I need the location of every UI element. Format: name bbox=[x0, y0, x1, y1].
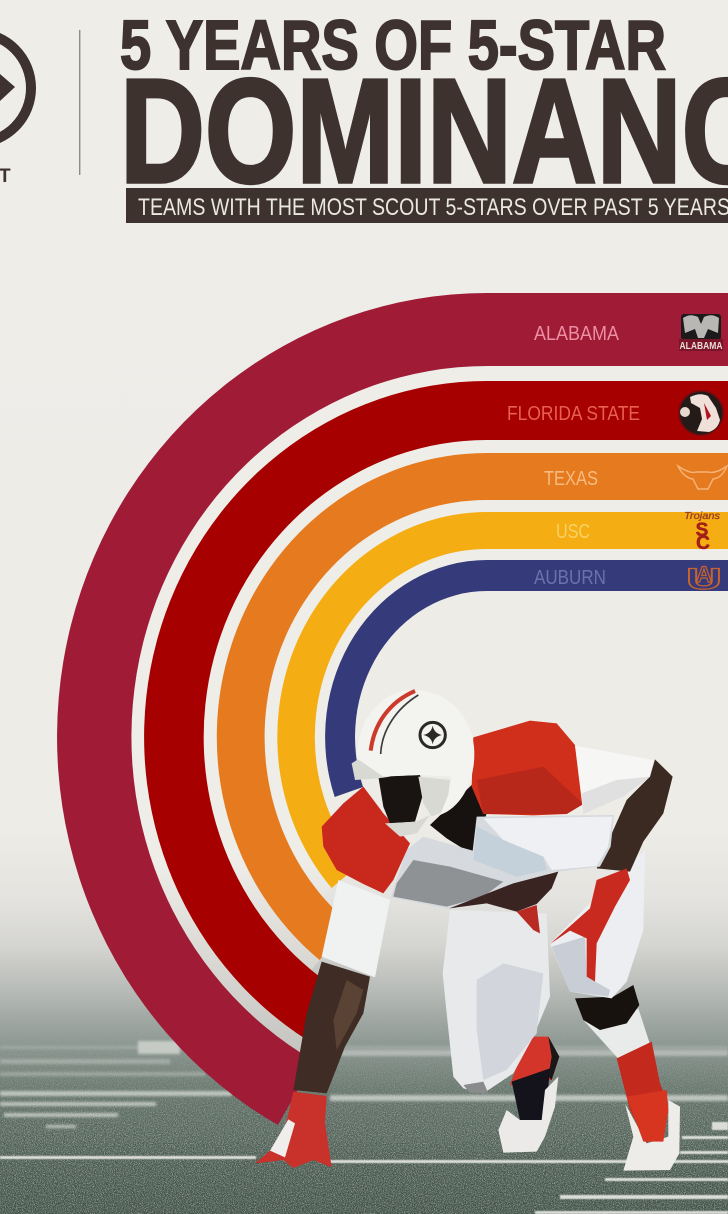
title bbox=[120, 6, 728, 214]
player: rear foot bbox=[498, 1037, 559, 1153]
label: USC: USC bbox=[556, 521, 590, 543]
arc: Texas bbox=[217, 453, 728, 960]
arc: Auburn bbox=[325, 560, 728, 797]
player: jersey shadow bbox=[393, 860, 503, 907]
player: left shoulder pad bbox=[322, 787, 410, 893]
player: right thigh and hip bbox=[550, 850, 645, 998]
icon: USC Trojans logo: C bbox=[696, 533, 710, 554]
icon: Texas longhorn logo bbox=[678, 466, 727, 489]
icon: USC Trojans logo: Trojans bbox=[684, 511, 720, 522]
illustration: football player in three-point stance bbox=[255, 690, 680, 1171]
player: sleeve shading bbox=[582, 777, 650, 814]
player: left sleeve bbox=[322, 880, 390, 977]
icon: Florida State logo bbox=[679, 391, 723, 435]
icon: Auburn AU logo bbox=[686, 562, 722, 596]
label: Auburn: AUBURN bbox=[534, 567, 606, 589]
player: back panel bbox=[472, 721, 583, 815]
player: right upper sleeve bbox=[575, 746, 653, 814]
player: jersey highlight bbox=[483, 817, 613, 870]
yard lines on field bbox=[0, 1041, 728, 1214]
label: Florida State: FLORIDA STATE bbox=[507, 403, 640, 425]
arc: USC bbox=[277, 512, 728, 888]
player: hip red bbox=[517, 905, 540, 933]
player: thigh shading bbox=[477, 963, 543, 1080]
player: helmet stripes bbox=[371, 691, 418, 754]
player: right glove bbox=[550, 868, 630, 982]
player: facemask bbox=[352, 755, 450, 837]
player: forearm highlight bbox=[333, 980, 363, 1050]
header divider bbox=[79, 30, 80, 175]
gaps between arcs bbox=[131, 366, 728, 1054]
player: helmet star logo bbox=[420, 722, 445, 748]
player: thigh shadow bbox=[463, 1082, 488, 1093]
label: Texas: TEXAS bbox=[544, 468, 598, 490]
player: face shadow bbox=[378, 775, 423, 823]
turf texture bbox=[0, 1038, 728, 1214]
icon: USC Trojans logo: S bbox=[696, 520, 708, 541]
icon: Auburn AU logo: U bbox=[686, 563, 722, 596]
player: left forearm bbox=[293, 962, 370, 1093]
player: belt and number bbox=[449, 872, 558, 912]
player: right forearm bbox=[597, 759, 673, 872]
icon: Alabama elephant logo bbox=[679, 314, 723, 352]
player: rear thigh bbox=[443, 910, 550, 1093]
player: helmet shell bbox=[357, 690, 474, 815]
player: back panel shade bbox=[477, 767, 583, 814]
player: jersey bbox=[391, 815, 614, 909]
logo: Scout circular mark (cropped) bbox=[0, 33, 31, 187]
player: jersey fold bbox=[473, 827, 547, 877]
player: neck shadow bbox=[430, 783, 487, 855]
label: Alabama: ALABAMA bbox=[534, 323, 620, 345]
icon: USC Trojans logo bbox=[684, 511, 720, 554]
player: left glove bbox=[255, 1092, 332, 1168]
player: hip shading bbox=[552, 937, 610, 997]
icon: Auburn AU logo: A bbox=[696, 562, 712, 587]
player: front leg bbox=[575, 985, 680, 1171]
